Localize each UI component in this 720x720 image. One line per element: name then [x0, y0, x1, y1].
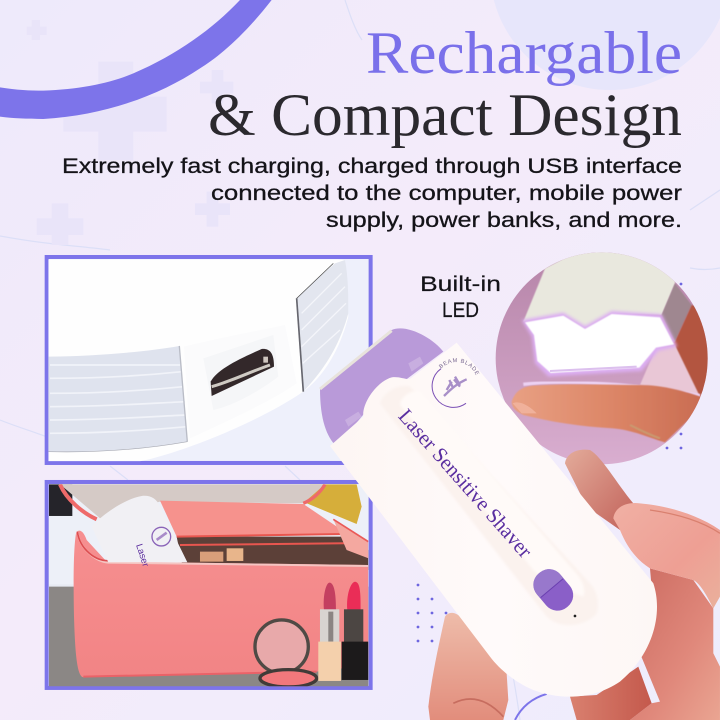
label: Built-in LED [420, 272, 501, 322]
label: Built-in LED: LED [442, 298, 479, 322]
icon: shaver in bag: Laser [134, 542, 151, 568]
product name: Laser Sensitive Shaver [394, 404, 537, 562]
title: & Compact Design [208, 82, 682, 148]
label: Built-in LED: Built-in [420, 272, 501, 296]
white body [330, 343, 657, 697]
index finger [565, 450, 633, 530]
icon: USB port [211, 349, 274, 396]
lower finger [570, 667, 652, 720]
description text: connected to the computer, mobile power [211, 181, 682, 205]
panel: makeup bag photo [47, 482, 371, 688]
description text [62, 154, 682, 232]
title [208, 20, 682, 148]
icon: shaver in bag [100, 496, 188, 566]
thumb [428, 613, 508, 720]
middle finger in front of shaver [613, 503, 720, 608]
photo: LED circle [496, 245, 717, 464]
logo: BEAM BLADE [438, 358, 480, 376]
dot grid [417, 283, 682, 642]
description text: supply, power banks, and more. [326, 208, 682, 232]
description text: Extremely fast charging, charged through USB interface [62, 154, 682, 178]
slider button [527, 563, 579, 617]
decorative arc top-left [0, 0, 272, 119]
palm [630, 568, 720, 720]
logo [432, 358, 480, 408]
hand behind shaver [428, 450, 720, 720]
icon: lipsticks [318, 582, 368, 681]
title: Rechargable [366, 20, 682, 86]
finger [512, 384, 703, 442]
decorative arc bottom [515, 694, 547, 720]
icon: compact mirror [255, 620, 317, 687]
shaver device [319, 328, 657, 697]
panel: USB port photo [47, 257, 371, 463]
purple blade head [320, 328, 443, 447]
